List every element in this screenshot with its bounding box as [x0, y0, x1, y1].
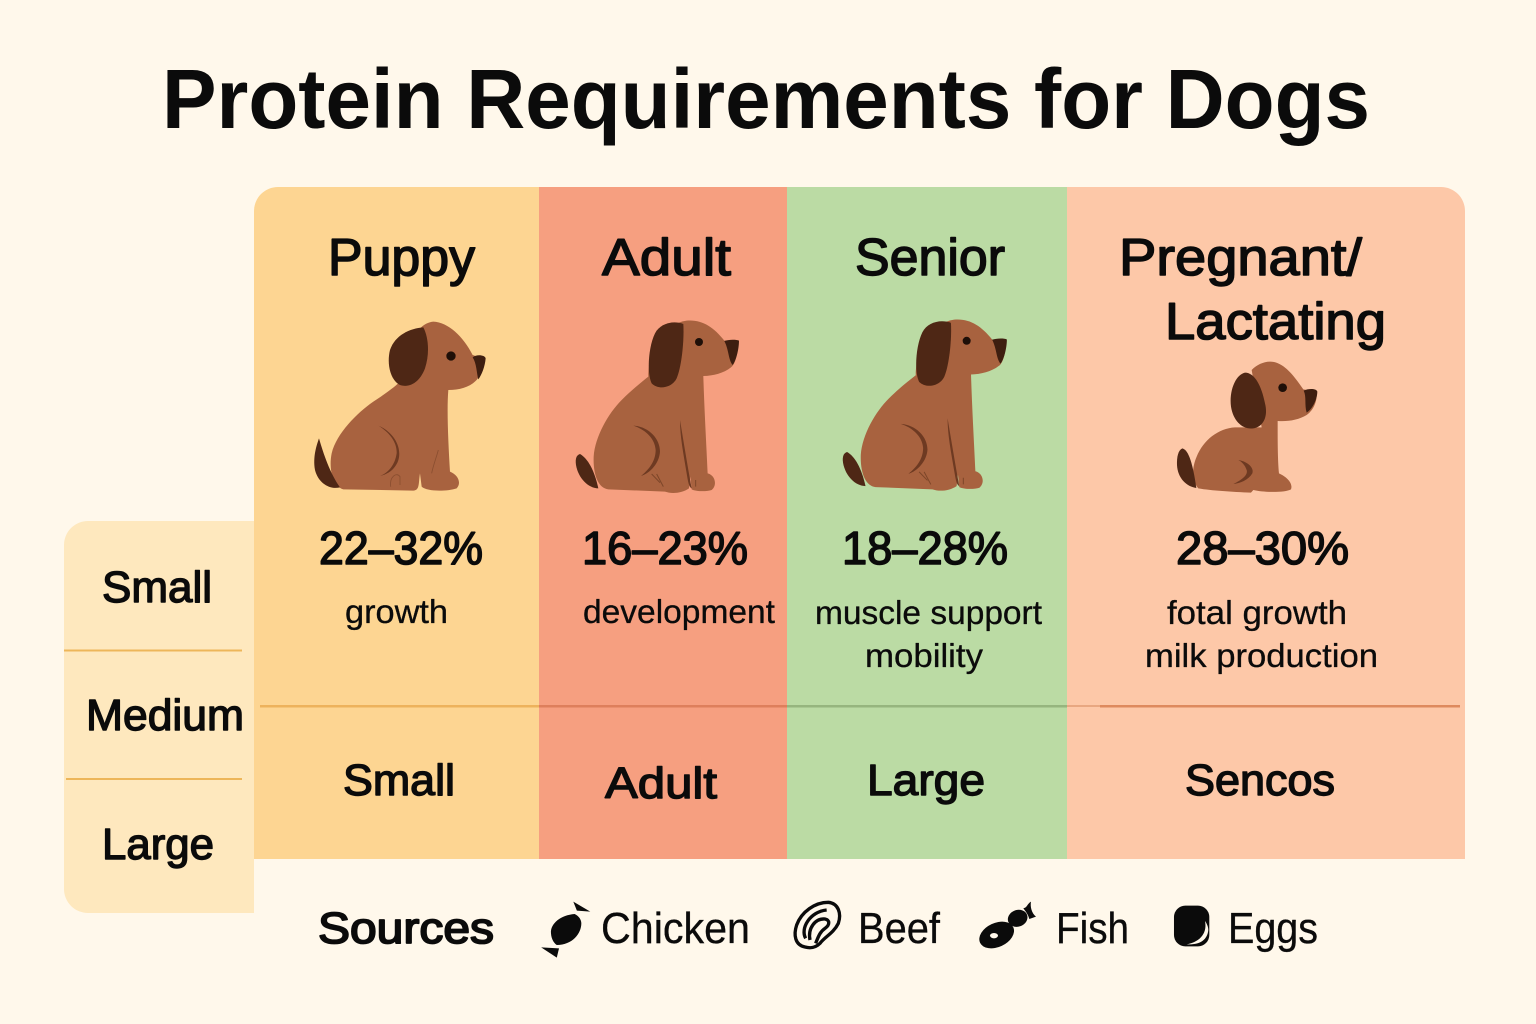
note: pregnant second line: milk production	[1145, 637, 1378, 674]
icon: chicken	[541, 902, 590, 958]
label: fish: Fish	[1056, 904, 1129, 953]
label: chicken: Chicken	[601, 904, 750, 953]
panel: puppy	[254, 187, 539, 859]
panel: adult	[539, 187, 787, 859]
value: senior protein: 18–28%	[842, 522, 1008, 574]
label: medium: Medium	[86, 691, 244, 740]
label: large: Large	[102, 820, 214, 869]
icon: beef	[795, 902, 840, 948]
note: senior second line: mobility	[865, 637, 984, 674]
note: puppy: growth	[345, 593, 448, 630]
label: beef: Beef	[858, 904, 941, 953]
icon: adult dog	[576, 321, 739, 493]
heading: pregnant: Pregnant/	[1119, 229, 1363, 287]
icon: pregnant dog	[1177, 362, 1317, 493]
icon: puppy dog	[314, 322, 486, 491]
legend: protein sources	[318, 902, 1318, 958]
note: senior: muscle support	[815, 594, 1042, 631]
icon: senior dog	[843, 319, 1007, 491]
size label: pregnant: Sencos	[1185, 756, 1335, 805]
size label: adult: Adult	[605, 759, 717, 808]
panel: size row labels	[64, 521, 254, 913]
value: puppy protein: 22–32%	[319, 522, 483, 574]
title: Protein Requirements for Dogs	[162, 52, 1370, 146]
icon: eggs	[1174, 906, 1209, 946]
note: pregnant: fotal growth	[1167, 594, 1347, 631]
legend heading: Sources	[318, 904, 494, 953]
label: small: Small	[102, 563, 212, 612]
size label: puppy: Small	[343, 756, 455, 805]
heading: adult: Adult	[602, 229, 732, 287]
value: pregnant protein: 28–30%	[1176, 522, 1349, 574]
panel: senior	[787, 187, 1067, 859]
size label: senior: Large	[867, 756, 985, 805]
heading: puppy: Puppy	[328, 229, 475, 287]
icon: fish	[975, 902, 1036, 954]
panel: pregnant or lactating	[1067, 187, 1465, 859]
heading: lactating: Lactating	[1165, 293, 1386, 351]
note: adult: development	[583, 593, 775, 630]
value: adult protein: 16–23%	[582, 522, 748, 574]
heading: senior: Senior	[855, 229, 1005, 287]
label: eggs: Eggs	[1228, 904, 1318, 953]
